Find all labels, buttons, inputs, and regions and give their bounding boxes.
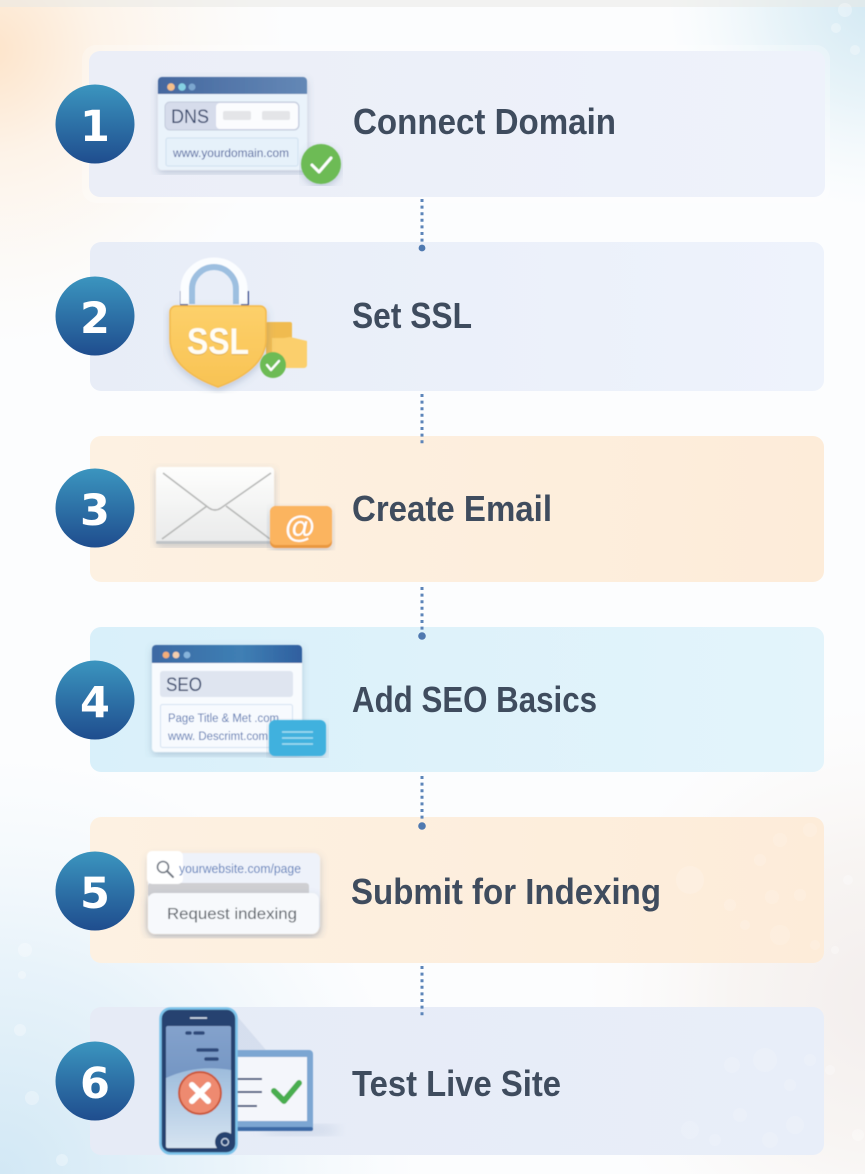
title: submit for indexing: Submit for Indexing — [351, 871, 661, 912]
icon: DNS browser window: www.yourdomain.com — [172, 146, 289, 160]
number badge 3 — [56, 468, 134, 548]
number badge 1: 1 — [80, 102, 110, 152]
icon: green check — [301, 144, 341, 184]
icon: desktop screen with check — [230, 1015, 340, 1134]
number badge 1 — [56, 84, 134, 164]
connector 1 to 2 — [419, 199, 425, 251]
panel: step 3 create email — [56, 436, 824, 582]
panel: step 2 set SSL — [56, 242, 824, 391]
card background — [89, 51, 825, 197]
panel: step 4 add SEO basics — [56, 627, 824, 772]
number badge 5: 5 — [80, 869, 110, 919]
title: connect domain: Connect Domain — [353, 101, 616, 142]
icon: indexing search panel: yourwebsite.com/page — [179, 862, 301, 876]
number badge 6: 6 — [80, 1059, 110, 1109]
icon: SEO browser window — [152, 645, 302, 752]
connector 2 to 3 — [420, 394, 424, 446]
number badge 2 — [56, 276, 134, 356]
number badge 5 — [56, 852, 134, 930]
icon: envelope — [156, 467, 274, 544]
icon: indexing search panel — [147, 851, 320, 934]
title: test live site: Test Live Site — [352, 1063, 561, 1104]
number badge 4 — [56, 660, 134, 740]
connector 4 to 5 — [418, 776, 426, 830]
title: set SSL: Set SSL — [352, 295, 472, 336]
icon: SEO browser window: SEO — [166, 675, 202, 696]
card background — [90, 817, 824, 963]
card background — [90, 1007, 824, 1155]
icon: blue text badge — [269, 720, 326, 756]
icon: SEO browser window: Page Title & Met .com — [168, 713, 279, 725]
icon: SSL shield with padlock — [170, 263, 307, 387]
icon: phone with error mark — [160, 1008, 236, 1154]
card background — [90, 436, 824, 582]
card background — [90, 242, 824, 391]
icon: SEO browser window: www. Descrimt.com — [167, 731, 268, 743]
card background — [90, 627, 824, 772]
icon: at-sign badge — [270, 506, 332, 548]
number badge 3: 3 — [80, 486, 110, 536]
connector 3 to 4 — [418, 587, 426, 640]
icon: SSL shield with padlock: SSL — [187, 322, 249, 363]
panel: step 5 submit for indexing — [56, 817, 824, 963]
connector 5 to 6 — [420, 966, 424, 1017]
number badge 6 — [56, 1042, 134, 1120]
title: create email: Create Email — [352, 488, 552, 529]
number badge 4: 4 — [80, 678, 110, 728]
panel: step 6 test live site — [56, 1007, 824, 1155]
title: add SEO basics: Add SEO Basics — [352, 679, 597, 720]
panel: step 1 connect domain — [56, 45, 830, 203]
icon: DNS browser window — [158, 77, 307, 170]
icon: at-sign badge: @ — [285, 509, 315, 544]
icon: indexing search panel: Request indexing — [167, 906, 297, 923]
icon: DNS browser window: DNS — [171, 107, 209, 128]
icon: SSL shield with padlock: SSL — [187, 321, 249, 362]
number badge 2: 2 — [80, 294, 110, 344]
